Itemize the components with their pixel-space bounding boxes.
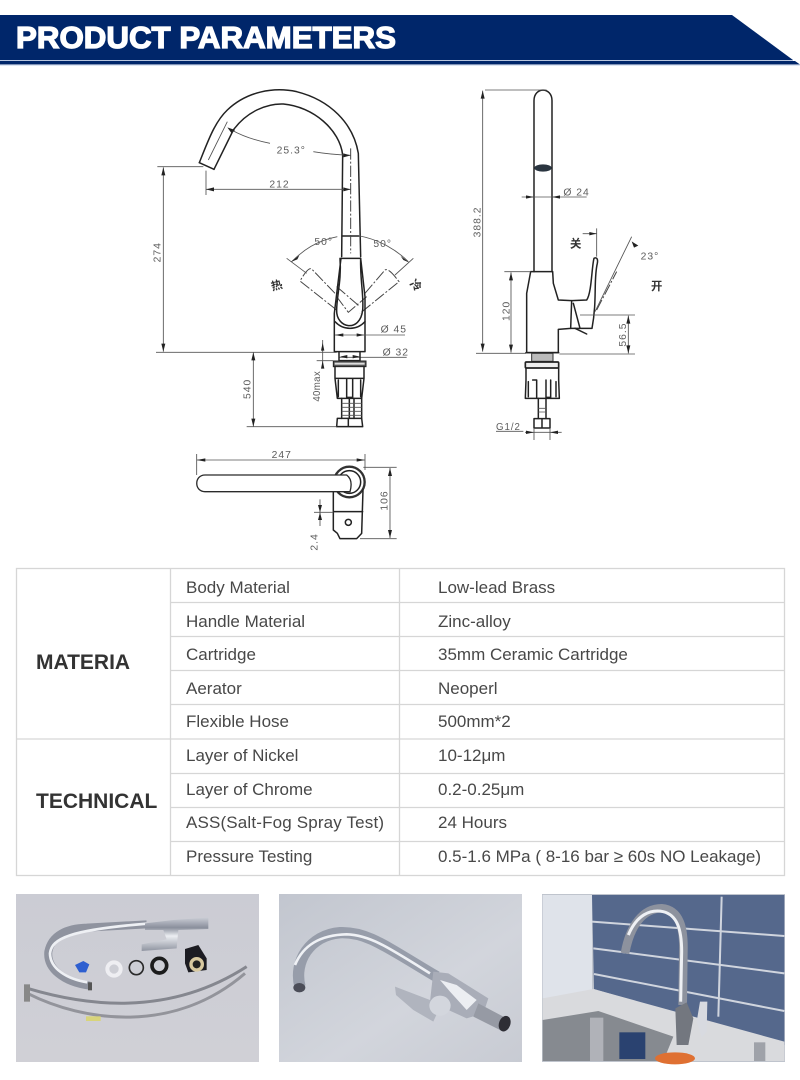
header banner [0, 15, 800, 66]
dimension G1/2: G1/2 [496, 422, 521, 433]
handle swing positions [269, 236, 425, 313]
row: layer of nickel: 10-12μm [438, 746, 505, 765]
angle dimension 25.3 [227, 127, 351, 157]
row: salt-fog test: 24 Hours [438, 813, 507, 832]
dimension 247 [197, 450, 365, 475]
row: cartridge: 35mm Ceramic Cartridge [438, 645, 628, 664]
faucet body and lever: 关 [570, 237, 582, 251]
faucet body: Ø 45 [381, 325, 407, 336]
drawing: side elevation of faucet [473, 90, 662, 440]
dimension 106: 106 [380, 490, 391, 511]
dimension 212: 212 [269, 180, 290, 191]
dimension 2.4 [309, 499, 333, 551]
swivel collar [334, 467, 365, 497]
row: body material: Body Material [186, 578, 290, 597]
base outline [333, 490, 363, 539]
dimension 106 [360, 467, 397, 539]
section label: technical: TECHNICAL [36, 790, 157, 813]
dimension 56.5: 56.5 [618, 323, 629, 347]
washers [107, 962, 121, 976]
braided hoses [27, 967, 247, 1003]
handle swing positions: 50° [373, 239, 392, 250]
dimension 540: 540 [243, 379, 254, 399]
wall [543, 895, 592, 998]
photo: chrome faucet lying flat [279, 894, 522, 1062]
row: layer of chrome: 0.2-0.25μm [438, 780, 524, 799]
drawing: front elevation of faucet [153, 90, 425, 427]
dimension 40max [312, 340, 333, 402]
row: flexible hose [186, 712, 511, 731]
handle swing positions: 热 [269, 277, 285, 294]
blue aerator part [75, 961, 89, 972]
body [430, 972, 488, 1018]
threaded shank [473, 1003, 503, 1030]
dimension 388.2 [473, 90, 547, 353]
section label: materia: MATERIA [36, 651, 130, 674]
handle swing positions: 50° [314, 237, 333, 248]
row: cartridge [186, 645, 628, 664]
table grid [16, 568, 784, 876]
row: flexible hose: 500mm*2 [438, 712, 511, 731]
blue tiles [592, 895, 784, 1045]
faucet body and lever [526, 228, 662, 353]
faucet body: Ø 32 [383, 347, 409, 358]
photo: faucet installed in kitchen [542, 894, 785, 1064]
soap dispenser [754, 1042, 765, 1061]
photo: faucet parts laid out [16, 894, 259, 1062]
row: body material: Low-lead Brass [438, 578, 555, 597]
dimension 388.2: 388.2 [473, 206, 484, 237]
sink [543, 1011, 673, 1061]
stem [534, 90, 552, 272]
faucet body [334, 258, 409, 358]
fruit in sink [655, 1052, 695, 1064]
row: pressure testing [186, 847, 761, 866]
dimension 274: 274 [153, 242, 164, 262]
mounting base [333, 352, 366, 427]
dimension 247: 247 [272, 450, 292, 461]
faucet body and lever: 开 [651, 280, 662, 293]
row: pressure testing: 0.5-1.6 MPa ( 8-16 bar ≥ 60s NO Leakage) [438, 847, 761, 866]
row: handle material [186, 612, 511, 631]
handle swing positions: 冷 [407, 276, 425, 295]
spout [48, 924, 147, 986]
dimension 2.4: 2.4 [309, 533, 320, 551]
row: cartridge: Cartridge [186, 645, 256, 664]
faucet body [142, 918, 208, 951]
row: aerator: Neoperl [438, 679, 498, 698]
row: handle material: Handle Material [186, 612, 305, 631]
spout and stem outline [199, 90, 361, 257]
dimension 120: 120 [501, 301, 512, 321]
dimension G1/2 [496, 422, 562, 440]
sink sticker [619, 1032, 645, 1059]
angle dimension 25.3: 25.3° [277, 145, 306, 156]
dimension diameter 24: Ø 24 [563, 187, 590, 198]
row: aerator: Aerator [186, 679, 242, 698]
row: body material [186, 578, 555, 597]
row: aerator [186, 679, 498, 698]
dimension 274 [153, 167, 337, 352]
mounting base [525, 353, 559, 428]
row: handle material: Zinc-alloy [438, 612, 511, 631]
row: salt-fog test: ASS(Salt-Fog Spray Test) [186, 813, 384, 832]
faucet body and lever: 23° [641, 251, 659, 262]
dimension 540 [243, 352, 337, 427]
dimension diameter 24 [522, 187, 590, 199]
dimension 40max: 40max [312, 371, 323, 402]
row: flexible hose: Flexible Hose [186, 712, 289, 731]
dimension 212 [206, 171, 351, 195]
lever [395, 987, 440, 1022]
specifications table [16, 568, 784, 876]
lever [197, 475, 351, 492]
drawing: top view of faucet [197, 450, 397, 551]
row: layer of chrome: Layer of Chrome [186, 780, 313, 799]
title: PRODUCT PARAMETERS [16, 20, 396, 55]
row: layer of chrome [186, 780, 524, 799]
row: pressure testing: Pressure Testing [186, 847, 312, 866]
row: layer of nickel: Layer of Nickel [186, 746, 298, 765]
countertop [543, 989, 784, 1061]
chrome faucet [625, 908, 683, 1005]
dimension 120 [501, 272, 531, 353]
row: salt-fog test [186, 813, 507, 832]
row: layer of nickel [186, 746, 505, 765]
black nut [185, 945, 207, 972]
dimension 56.5 [559, 316, 635, 354]
spout [299, 933, 437, 987]
